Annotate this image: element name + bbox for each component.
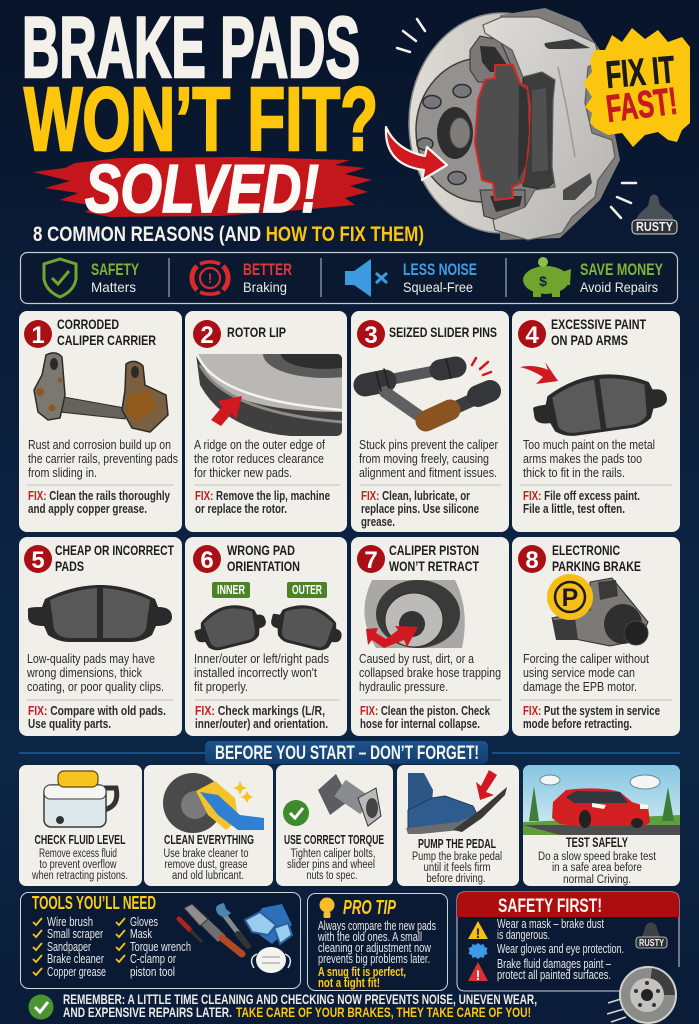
- icon: warning: [468, 921, 488, 941]
- icon: bulb: [320, 898, 334, 918]
- heading: CALIPER CARRIER: [57, 332, 156, 348]
- panel: 3 seized slider pins: [351, 311, 509, 532]
- list: Brake cleaner: [47, 952, 104, 966]
- text: normal Criving.: [563, 874, 631, 886]
- solved banner: SOLVED!: [85, 151, 319, 227]
- label: outer: OUTER: [292, 582, 322, 597]
- number badge 7: 7: [364, 547, 378, 574]
- text: CHECK FLUID LEVEL: [34, 833, 126, 847]
- description: arms makes the pads too: [523, 452, 642, 466]
- description: from moving freely, causing: [359, 452, 489, 466]
- description: [359, 438, 498, 480]
- fix: FIX: Clean the piston. Check: [360, 704, 490, 718]
- icon: danger: !: [476, 967, 480, 983]
- fix: replace pins. Use silicone: [361, 502, 479, 516]
- heading: PADS: [55, 558, 84, 574]
- description: [26, 652, 164, 694]
- logo: rusty small: [636, 922, 667, 949]
- fix: and apply copper grease.: [28, 502, 147, 516]
- benefit: less noise: [345, 259, 477, 297]
- illustration: brake rotor and caliper: [386, 8, 620, 240]
- description: hydraulic pressure.: [359, 680, 448, 694]
- label: inner: [212, 582, 250, 598]
- checkmarks: [33, 918, 125, 975]
- number badge 5: [24, 545, 52, 574]
- panel: check fluid level: [19, 765, 142, 886]
- description: Caused by rust, dirt, or a: [359, 652, 474, 666]
- description: for thicker new pads.: [194, 466, 292, 480]
- fix: [195, 489, 330, 516]
- fix: [523, 489, 640, 516]
- illustration: red car scene: [523, 765, 680, 835]
- illustration: painted pad: [530, 366, 670, 441]
- benefit: less noise: Squeal-Free: [403, 279, 473, 295]
- panel: 8 electronic parking brake: [512, 537, 680, 736]
- number badge 2: 2: [200, 322, 214, 349]
- panel: pump the pedal: [397, 765, 519, 886]
- benefit: less noise: LESS NOISE: [403, 260, 477, 279]
- description: Stuck pins prevent the caliper: [359, 438, 498, 452]
- number badge 8: 8: [525, 547, 539, 574]
- red arrow: [211, 396, 242, 426]
- fix: inner/outer) and orientation.: [195, 717, 328, 731]
- brake pad outlined red: [475, 65, 530, 200]
- description: wrong dimensions, thick: [26, 666, 143, 680]
- tip text: with the old ones. A small: [317, 930, 422, 944]
- header: [457, 892, 679, 917]
- safety text: Wear gloves and eye protection.: [497, 942, 624, 956]
- heading: ROTOR LIP: [227, 324, 286, 340]
- icon: warning: !: [476, 925, 480, 941]
- icon: check: [28, 994, 54, 1020]
- text: to prevent overflow: [40, 859, 117, 871]
- description: Low-quality pads may have: [27, 652, 155, 666]
- description: fit properly.: [194, 680, 248, 694]
- icon: spinning rotor: [607, 967, 676, 1023]
- text: until it feels firm: [424, 862, 490, 874]
- illustration: pad: [28, 585, 172, 642]
- number badge 6: 6: [200, 547, 214, 574]
- number badge 3: 3: [364, 322, 378, 349]
- tip text: A snug fit is perfect,: [318, 965, 406, 979]
- list: C-clamp or: [130, 952, 176, 966]
- label: outer: [287, 582, 327, 598]
- illustration: carrier: [34, 353, 168, 432]
- title: BRAKE PADS: [22, 0, 360, 96]
- red double arrow: [366, 626, 418, 648]
- benefit: save money: SAVE MONEY: [580, 260, 663, 279]
- description: the carrier rails, preventing pads: [28, 452, 178, 466]
- fix: [28, 489, 170, 516]
- heading: WON’T RETRACT: [389, 558, 479, 574]
- icon: reservoir: [44, 771, 117, 827]
- safety text: [497, 917, 624, 982]
- heading: CALIPER PISTON: [389, 542, 479, 558]
- title: WON’T FIT?: [24, 70, 378, 170]
- icon: danger: [468, 962, 488, 983]
- safety text: Wear a mask – brake dust: [497, 917, 604, 931]
- fix: Use quality parts.: [28, 717, 111, 731]
- heading: WRONG PAD: [227, 542, 295, 558]
- description: Forcing the caliper without: [523, 652, 649, 666]
- fix: [523, 704, 660, 731]
- description: [359, 652, 501, 694]
- description: Rust and corrosion build up on: [28, 438, 171, 452]
- description: [194, 652, 329, 694]
- list: Sandpaper: [47, 940, 91, 954]
- illustration: rotor lip: [196, 354, 342, 436]
- list: piston tool: [130, 965, 175, 979]
- number badge 7: [357, 545, 385, 574]
- benefit: better braking: BETTER: [243, 260, 292, 279]
- text: and old lubricant.: [172, 870, 244, 882]
- description: coating, or poor quality clips.: [27, 680, 164, 694]
- heading: EXCESSIVE PAINT: [551, 316, 646, 332]
- fix: hose for internal collapse.: [360, 717, 480, 731]
- heading: CORRODED: [57, 316, 119, 332]
- description: alignment and fitment issues.: [359, 466, 497, 480]
- list: [47, 915, 191, 979]
- benefit: better braking: !: [208, 270, 212, 286]
- description: Inner/outer or left/right pads: [194, 652, 329, 666]
- list: Copper grease: [47, 965, 106, 979]
- benefit: save money: [523, 257, 663, 297]
- text: [164, 833, 254, 882]
- text: slider pins and wheel: [287, 859, 375, 871]
- icon: cleaning rotor: [163, 773, 264, 833]
- starburst: fix it fast: [583, 28, 690, 147]
- heading: [389, 542, 479, 574]
- motion marks: [397, 19, 636, 218]
- illustration: piston: [364, 580, 465, 648]
- panel: safety first: [457, 892, 679, 991]
- list: Gloves: [130, 915, 158, 929]
- number badge 5: 5: [31, 547, 45, 574]
- panel: tools: [20, 892, 300, 988]
- tip text: [317, 919, 436, 990]
- heading: [552, 542, 641, 574]
- heading: PARKING BRAKE: [552, 558, 641, 574]
- benefit: safety: Matters: [91, 279, 136, 295]
- list: Mask: [130, 927, 153, 941]
- fix: [195, 704, 328, 731]
- tip text: not a tight fit!: [318, 976, 380, 990]
- panel: use correct torque: [276, 765, 393, 886]
- section banner: before you start: [19, 741, 680, 764]
- message: TAKE CARE OF YOUR BRAKES, THEY TAKE CARE OF YOU!: [236, 1004, 531, 1020]
- text: PUMP THE PEDAL: [418, 837, 496, 851]
- text: Use brake cleaner to: [164, 848, 248, 860]
- description: [523, 438, 655, 480]
- description: Too much paint on the metal: [523, 438, 655, 452]
- fix: FIX: Remove the lip, machine: [195, 489, 330, 503]
- description: A ridge on the outer edge of: [194, 438, 325, 452]
- description: the rotor reduces clearance: [194, 452, 324, 466]
- illustration: EPB motor: [547, 574, 648, 646]
- text: USE CORRECT TORQUE: [284, 833, 384, 847]
- text: CLEAN EVERYTHING: [164, 833, 254, 847]
- number badge 2: [193, 320, 221, 349]
- text: before driving.: [426, 873, 486, 885]
- remember strip: [28, 991, 537, 1020]
- fix: [28, 704, 166, 731]
- header: SAFETY FIRST!: [498, 896, 602, 917]
- heading: ON PAD ARMS: [551, 332, 628, 348]
- list: Small scraper: [47, 927, 103, 941]
- text: remove dust, grease: [164, 859, 248, 871]
- number badge 1: [24, 320, 52, 349]
- safety text: is dangerous.: [497, 928, 550, 942]
- description: [28, 438, 178, 480]
- number badge 6: [193, 545, 221, 574]
- fix: FIX: Check markings (L/R,: [195, 704, 325, 718]
- icon: boot on pedal: [406, 770, 507, 834]
- safety text: protect all painted surfaces.: [497, 968, 611, 982]
- fix: FIX: Clean the rails thoroughly: [28, 489, 170, 503]
- description: installed incorrectly won't: [194, 666, 317, 680]
- fix: FIX: Clean, lubricate, or: [361, 489, 470, 503]
- list: Torque wrench: [130, 940, 191, 954]
- benefit: better braking: Braking: [243, 279, 287, 295]
- fix: mode before retracting.: [523, 717, 632, 731]
- text: when retracting pistons.: [31, 870, 128, 882]
- message: [63, 991, 537, 1020]
- text: Pump the brake pedal: [412, 851, 502, 863]
- tip text: prevents big problems later.: [318, 952, 430, 966]
- section banner: before you start: BEFORE YOU START – DON’T FORGET!: [215, 743, 479, 764]
- panel: 4 excessive paint: [512, 311, 680, 532]
- benefit: better braking: [192, 260, 292, 295]
- text: TEST SAFELY: [566, 834, 628, 850]
- description: thick to fit in the rails.: [523, 466, 625, 480]
- heading: [551, 316, 646, 348]
- text: [412, 837, 502, 885]
- red arrow: [520, 362, 558, 384]
- number badge 3: [357, 320, 385, 349]
- description: [194, 438, 325, 480]
- benefit: save money: Avoid Repairs: [580, 279, 658, 295]
- text: [284, 833, 384, 882]
- heading: ORIENTATION: [227, 558, 300, 574]
- tip text: cleaning or adjustment now: [318, 941, 432, 955]
- benefits bar: [20, 252, 678, 304]
- heading: ELECTRONIC: [552, 542, 620, 558]
- text: Do a slow speed brake test: [538, 851, 657, 863]
- safety text: Brake fluid damages paint –: [497, 957, 611, 971]
- panel: 5 cheap pads: [19, 537, 182, 736]
- list: Wire brush: [47, 915, 93, 929]
- label: inner: INNER: [217, 582, 245, 597]
- panel: 1 corroded caliper carrier: [19, 311, 182, 532]
- number badge 1: 1: [31, 322, 45, 349]
- illustration: inner pad: [190, 598, 270, 655]
- fix: [360, 704, 490, 731]
- description: using service mode can: [523, 666, 635, 680]
- logo: rusty top: [632, 194, 677, 234]
- panel: test safely: [523, 765, 680, 886]
- subtitle: 8 COMMON REASONS (AND HOW TO FIX THEM): [33, 223, 424, 246]
- fix: FIX: Compare with old pads.: [28, 704, 166, 718]
- panel: 7 caliper piston: [351, 537, 509, 736]
- heading: PRO TIP: [343, 897, 396, 919]
- description: [523, 652, 649, 694]
- heading: [55, 542, 174, 574]
- fix: File a little, test often.: [523, 502, 625, 516]
- fix: grease.: [361, 515, 395, 529]
- tip text: Always compare the new pads: [318, 919, 436, 933]
- fix: FIX: Put the system in service: [523, 704, 660, 718]
- illustration: outer pad: [267, 598, 347, 655]
- logo: rusty top: RUSTY: [636, 220, 674, 234]
- illustration: slider pins: [365, 358, 491, 421]
- benefit: safety: SAFETY: [91, 260, 139, 279]
- text: in a safe area before: [552, 862, 642, 874]
- icon: bolt with check: [283, 774, 381, 826]
- heading: SEIZED SLIDER PINS: [389, 324, 497, 340]
- logo: rusty small: RUSTY: [639, 938, 664, 949]
- number badge 4: [518, 320, 546, 349]
- heading: [227, 542, 300, 574]
- parking symbol: P: [562, 584, 578, 612]
- fix: or replace the rotor.: [195, 502, 287, 516]
- heading: [57, 316, 156, 348]
- panel: 6 wrong orientation: [185, 537, 347, 736]
- description: from sliding in.: [28, 466, 97, 480]
- caliper body: [483, 17, 615, 240]
- benefit: safety: [44, 259, 139, 297]
- message: AND EXPENSIVE REPAIRS LATER.: [63, 1004, 232, 1020]
- text: [538, 834, 657, 886]
- text: nuts to spec.: [306, 870, 358, 882]
- panel: pro tip: [308, 894, 448, 990]
- description: collapsed brake hose trapping: [359, 666, 501, 680]
- icon: glove: [468, 943, 488, 959]
- heading: TOOLS YOU’LL NEED: [32, 893, 156, 913]
- text: [31, 833, 128, 882]
- benefit: save money: $: [539, 273, 547, 289]
- description: damage the EPB motor.: [523, 680, 637, 694]
- number badge 8: [518, 545, 546, 574]
- number badge 4: 4: [525, 322, 539, 349]
- fix: FIX: File off excess paint.: [523, 489, 640, 503]
- text: Remove excess fluid: [39, 848, 117, 860]
- heading: CHEAP OR INCORRECT: [55, 542, 174, 558]
- text: Tighten caliper bolts,: [290, 848, 376, 860]
- icon: tools: [179, 903, 292, 973]
- fix: [361, 489, 479, 529]
- title: [22, 0, 378, 170]
- red arrow: [386, 127, 447, 180]
- panel: clean everything: [144, 765, 273, 886]
- panel: 2 rotor lip: [185, 311, 347, 532]
